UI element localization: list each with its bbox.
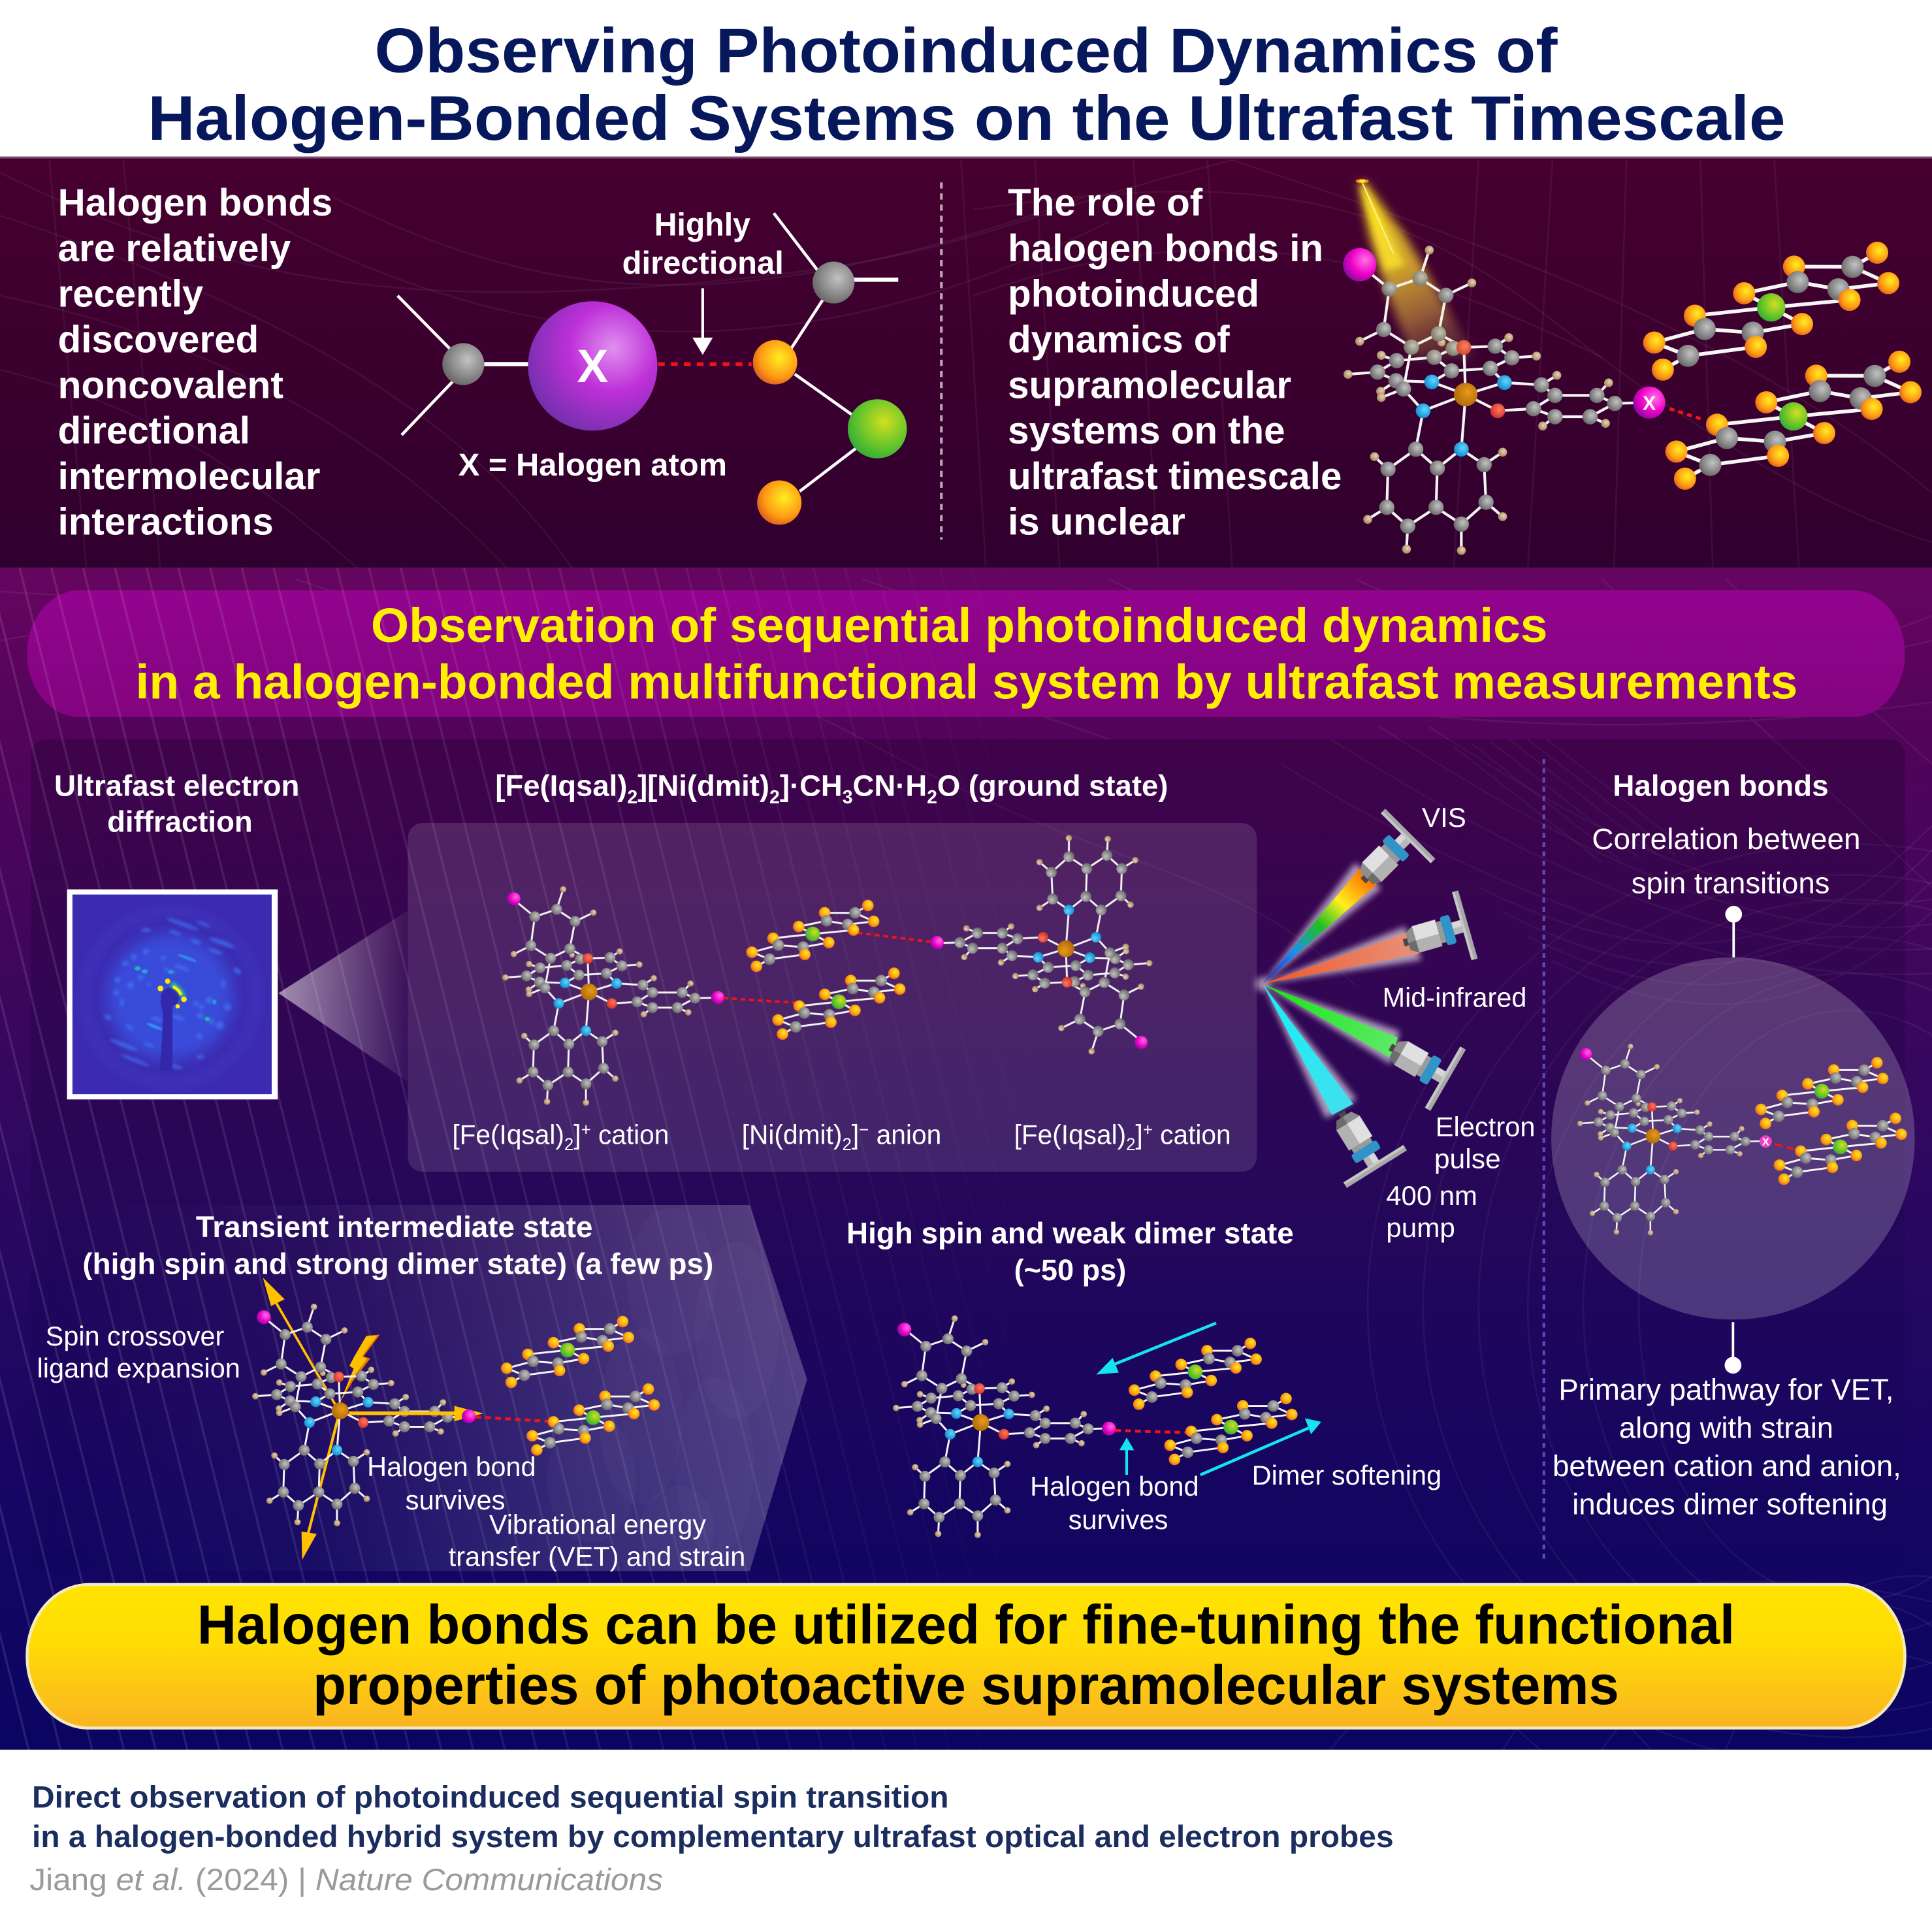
panel: ground state structures: [408, 823, 1257, 1172]
callout: conclusion pill: properties of photoactive supramolecular systems: [313, 1654, 1619, 1716]
molecule: left iron cation: [502, 886, 724, 1106]
text: primary pathway: [1553, 1373, 1901, 1521]
label: right cation: 2: [1126, 1135, 1136, 1154]
heading: ground state compound: O (ground state): [937, 769, 1168, 803]
label: halogen bond survives: survives: [406, 1485, 505, 1515]
arrow: dimer softening lower: [1200, 1418, 1321, 1475]
label: 400 nm pump: pump: [1386, 1212, 1455, 1243]
label: anion: [Ni(dmit): [742, 1119, 844, 1150]
label: electron pulse: [1434, 1111, 1536, 1174]
molecule: dimer in high spin state: [1116, 1338, 1298, 1465]
text: primary pathway: induces dimer softening: [1572, 1487, 1888, 1521]
arrow: expansion up: [263, 1278, 340, 1412]
text: primary pathway: along with strain: [1619, 1411, 1833, 1445]
label: left cation: 2: [564, 1135, 573, 1154]
panel: results backdrop: [31, 739, 1905, 1571]
heading: ground state compound: 3: [843, 786, 853, 807]
callout: conclusion pill: Halogen bonds can be utilized for fine-tuning the functional: [197, 1594, 1735, 1656]
atom: carbon left: [442, 343, 484, 385]
title: [148, 16, 1786, 153]
text: correlation between spin transitions: Correlation between: [1592, 822, 1861, 856]
text block: halogen bond definition: are relatively: [58, 227, 291, 270]
label: highly directional: [622, 207, 784, 281]
heading: ultrafast electron diffraction: [54, 769, 299, 838]
connector: bottom pin: [1725, 1322, 1741, 1374]
label: spin crossover: Spin crossover: [46, 1321, 225, 1351]
atom: X halogen bond donor: [1634, 387, 1666, 419]
molecule: cation in spotlight: X: [1762, 1136, 1769, 1148]
label: anion: anion: [869, 1119, 941, 1150]
text block: role of halogen bonds: supramolecular: [1008, 364, 1291, 406]
icon: lightning bolt: [340, 1334, 380, 1403]
footer: citation: in a halogen-bonded hybrid system by complementary ultrafast optical and electron probes: [32, 1819, 1394, 1854]
beam stop: [159, 988, 180, 1071]
atom: halogen on transient cation: [462, 1409, 475, 1423]
label: 400 nm pump: 400 nm: [1386, 1180, 1477, 1211]
label: 400 nm pump: [1386, 1180, 1477, 1243]
atom: iodine top: [1343, 248, 1376, 282]
label: right cation: cation: [1153, 1119, 1231, 1150]
label: left cation: [Fe(Iqsal): [452, 1119, 567, 1150]
heading: transient intermediate state: Transient intermediate state: [196, 1210, 592, 1244]
title: Halogen-Bonded Systems on the Ultrafast Timescale: [148, 84, 1786, 153]
label: halogen bond survives: survives: [1069, 1504, 1168, 1535]
label: mid-infrared: Mid-infrared: [1383, 982, 1526, 1012]
heading: ground state compound: [Fe(Iqsal): [495, 769, 627, 803]
heading: ground state compound: ][Ni(dmit): [637, 769, 769, 803]
callout: conclusion pill: [27, 1585, 1905, 1728]
label: electron pulse: pulse: [1434, 1143, 1501, 1174]
molecule: large nickel dimer: [1643, 242, 1922, 490]
circle: molecule spotlight: [1551, 958, 1915, 1319]
label: halogen bond survives: [367, 1451, 536, 1515]
label: X equals halogen atom: X = Halogen atom: [459, 447, 727, 483]
molecule: cation in transient state: [252, 1304, 472, 1526]
heading: observation headline: [136, 598, 1797, 709]
molecule: large iron cation with halogen: [1343, 228, 1666, 555]
label: highly directional: Highly: [654, 207, 750, 242]
molecule: nickel anion dimer: [723, 900, 933, 1040]
arrow: vibrational energy transfer: [349, 1406, 483, 1421]
atom: nickel: [848, 399, 907, 459]
heading: ground state compound: ]·CH: [780, 769, 843, 803]
label: highly directional: directional: [622, 246, 784, 281]
panel: transient intermediate state: [31, 1205, 807, 1572]
atom: carbon top: [813, 261, 854, 304]
label: anion: ]: [852, 1119, 859, 1150]
text block: halogen bond definition: intermolecular: [58, 455, 320, 498]
panel: high spin and weak dimer state: [846, 1216, 1441, 1538]
heading: ultrafast electron diffraction: diffraction: [107, 805, 253, 838]
heading: halogen bonds: Halogen bonds: [1613, 769, 1829, 803]
label: halogen bond survives: [1030, 1471, 1199, 1535]
beam: mid-infrared: [1263, 890, 1477, 984]
diagram: probe beams: [1255, 802, 1536, 1243]
heading: ground state compound: CN·H: [853, 769, 927, 803]
label: anion: 2: [842, 1135, 852, 1154]
label: left cation: +: [581, 1119, 591, 1139]
text block: role of halogen bonds: The role of: [1008, 182, 1203, 224]
label: dimer softening: Dimer softening: [1252, 1460, 1441, 1490]
text block: role of halogen bonds: photoinduced: [1008, 273, 1259, 315]
heading: transient intermediate state: [82, 1210, 713, 1281]
label: right cation: +: [1143, 1119, 1153, 1139]
text block: halogen bond definition: directional: [58, 410, 250, 452]
text block: role of halogen bonds: is unclear: [1008, 501, 1185, 543]
molecule: dimer in spotlight: [1755, 1057, 1907, 1185]
heading: observation headline: in a halogen-bonded multifunctional system by ultrafast measurements: [136, 655, 1797, 709]
label: vibrational energy transfer: transfer (VET) and strain: [449, 1541, 745, 1572]
label: right cation: [Fe(Iqsal): [1014, 1119, 1129, 1150]
text block: halogen bond definition: recently: [58, 273, 204, 315]
label: left cation: ]: [573, 1119, 581, 1150]
projection: zoom wedge from pattern to panel: [278, 910, 408, 1082]
text block: halogen bond definition: interactions: [58, 501, 274, 543]
footer: citation: [29, 1779, 1394, 1897]
title: Observing Photoinduced Dynamics of: [374, 16, 1558, 86]
panel: halogen bonds role: [1551, 769, 1915, 1521]
panel: top introduction band: [0, 157, 1932, 579]
beam: electron pulse: [1263, 984, 1466, 1111]
heading: ground state compound: 2: [627, 786, 637, 807]
text block: halogen bond definition: noncovalent: [58, 364, 283, 406]
label: X on atom: X: [1643, 393, 1656, 414]
icon: light beam on molecule: [1356, 179, 1475, 357]
heading: transient intermediate state: (high spin and strong dimer state) (a few ps): [82, 1248, 713, 1281]
text block: role of halogen bonds: dynamics of: [1008, 319, 1230, 361]
heading: ultrafast electron diffraction: Ultrafast electron: [54, 769, 299, 803]
chart: electron diffraction pattern: [67, 890, 278, 1099]
text block: halogen bond definition: Halogen bonds: [58, 182, 332, 224]
text: correlation between spin transitions: [1592, 822, 1861, 900]
heading: high spin: (~50 ps): [1014, 1253, 1126, 1287]
text block: role of halogen bonds: halogen bonds in: [1008, 227, 1323, 270]
diagram: halogen bond schematic: [398, 213, 907, 524]
arrow: expansion down: [302, 1412, 340, 1560]
label: halogen bond survives: Halogen bond: [367, 1451, 536, 1482]
footer: citation: Jiang et al. (2024) | Nature Communications: [29, 1862, 663, 1897]
text: primary pathway: between cation and anion,: [1553, 1449, 1901, 1483]
panel: main purple background: [0, 568, 1932, 1750]
text: primary pathway: Primary pathway for VET,: [1558, 1373, 1894, 1406]
heading: ground state compound: 2: [769, 786, 780, 807]
molecule: cation in spotlight: [1577, 1044, 1772, 1236]
text block: halogen bond definition: discovered: [58, 319, 259, 361]
label: spin crossover: [37, 1321, 240, 1383]
heading: observation headline: Observation of sequential photoinduced dynamics: [371, 598, 1547, 652]
heading: high spin: [846, 1216, 1294, 1287]
label: left cation: cation: [591, 1119, 669, 1150]
label: halogen bond survives: Halogen bond: [1030, 1471, 1199, 1502]
atom: sulfur acceptor: [753, 340, 797, 385]
label: vibrational energy transfer: [449, 1509, 745, 1572]
banner: observation shape: [27, 590, 1905, 717]
beam: visible: [1263, 809, 1435, 984]
label: anion: −: [859, 1119, 869, 1139]
atom: sulfur bottom: [757, 481, 801, 524]
arrow: dimer softening upper: [1096, 1323, 1216, 1375]
molecule: cation in high spin state: [893, 1315, 1116, 1538]
text block: role of halogen bonds: ultrafast timescale: [1008, 455, 1342, 498]
text block: role of halogen bonds: [1008, 182, 1342, 543]
heading: ground state compound: 2: [927, 786, 937, 807]
halogen bond red dashes: [658, 363, 752, 365]
label: spin crossover: ligand expansion: [37, 1353, 240, 1383]
beam: 400 nm pump: [1263, 984, 1407, 1188]
label: electron pulse: Electron: [1436, 1111, 1536, 1142]
heading: high spin: High spin and weak dimer state: [846, 1216, 1294, 1249]
connector: top pin: [1725, 906, 1742, 958]
arrow: directional pointer: [692, 288, 713, 355]
text block: halogen bond definition: [58, 182, 332, 543]
text: correlation between spin transitions: spin transitions: [1632, 867, 1829, 900]
text block: role of halogen bonds: systems on the: [1008, 410, 1285, 452]
label: right cation: ]: [1136, 1119, 1143, 1150]
label: X: X: [577, 340, 608, 393]
arrow: halogen bond pointer: [1119, 1438, 1135, 1475]
label: vibrational energy transfer: Vibrational energy: [489, 1509, 706, 1540]
molecule: dimer in transient state: [475, 1316, 660, 1456]
label: VIS: VIS: [1422, 802, 1466, 833]
molecule: right iron cation: [930, 835, 1153, 1054]
atom: halogen X: [528, 301, 657, 430]
footer: citation: Direct observation of photoinduced sequential spin transition: [32, 1779, 949, 1814]
